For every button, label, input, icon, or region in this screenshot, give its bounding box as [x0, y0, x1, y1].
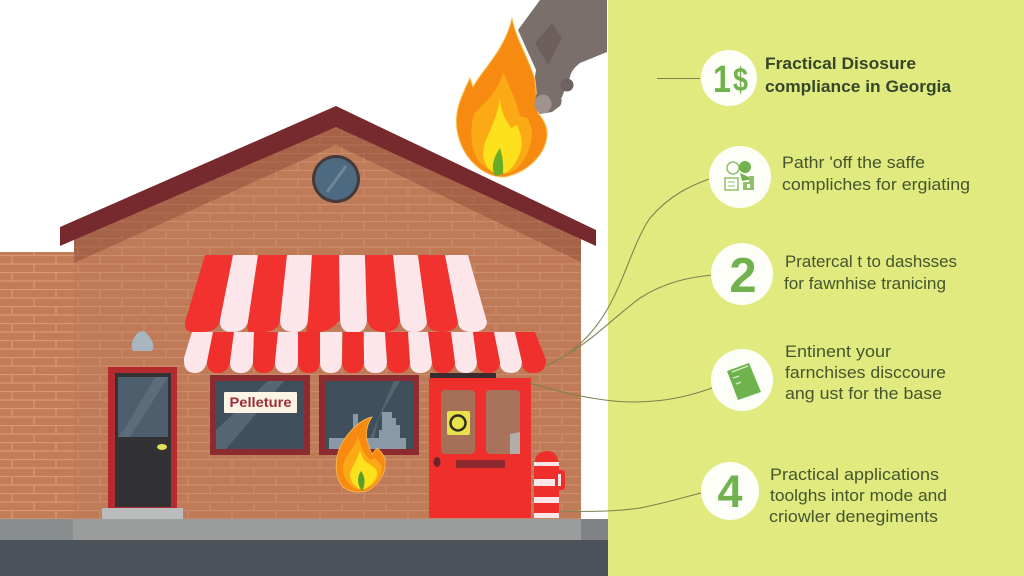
badge: 1$	[701, 50, 757, 106]
main brick wall	[74, 122, 581, 519]
badge: 1$: 1	[713, 59, 731, 101]
window sign: Pelleture	[230, 394, 292, 410]
item 1 text: compliance in Georgia	[765, 78, 952, 96]
badge: 2: 2	[729, 249, 757, 303]
badge: safety icon	[709, 146, 771, 208]
item 5 text: toolghs intor mode and	[770, 487, 947, 505]
item 4 text: farnchises disccoure	[785, 364, 946, 382]
item 1 text: Fractical Disosure	[765, 55, 916, 73]
icon: hand holding flame	[518, 0, 607, 110]
item 4	[711, 343, 946, 411]
badge: 1$: $	[733, 61, 748, 98]
item 3 text: Pratercal t to dashsses	[785, 253, 957, 271]
item 1	[701, 50, 952, 106]
badge: 2	[711, 243, 773, 305]
badge: book icon	[711, 349, 773, 411]
item 3	[711, 243, 957, 305]
road	[0, 540, 608, 576]
item 5 text: criowler denegiments	[769, 508, 938, 526]
panel: green background	[608, 0, 1024, 576]
connector lines	[530, 78, 713, 511]
item 2 text: Pathr 'off the saffe	[782, 154, 925, 172]
wall lamp	[132, 331, 153, 351]
awning	[184, 255, 546, 373]
roof shadow	[74, 124, 581, 263]
item 3 text: for fawnhise tranicing	[784, 275, 946, 293]
item 2 text: compliches for ergiating	[782, 176, 970, 194]
badge: 4: 4	[717, 466, 743, 517]
red entry door	[429, 373, 531, 518]
item 5	[701, 462, 947, 526]
storefront building	[0, 106, 596, 519]
icon: thumb on flame	[534, 89, 562, 114]
sidewalk	[0, 519, 608, 540]
item 1 text	[765, 55, 952, 96]
fire hydrant	[534, 451, 565, 518]
item 4 text	[785, 343, 946, 403]
icon: small window flame	[336, 417, 385, 492]
left entry door	[102, 367, 183, 519]
item 4 text: Entinent your	[785, 343, 892, 361]
item 5 text	[769, 466, 947, 526]
item 4 text: ang ust for the base	[785, 385, 942, 403]
upper awning stripes	[185, 255, 487, 333]
item 3 text	[784, 253, 957, 293]
round attic window	[312, 155, 360, 203]
badge: 4	[701, 462, 759, 520]
left brick wing	[0, 252, 74, 519]
shop window with display	[319, 375, 419, 455]
icon: large roof flame	[456, 18, 547, 177]
item 2 text	[782, 154, 970, 194]
roof	[60, 106, 596, 246]
item 5 text: Practical applications	[770, 466, 939, 484]
shop window with sign	[210, 375, 310, 455]
lower awning valance	[184, 332, 546, 373]
item 2	[709, 146, 970, 208]
